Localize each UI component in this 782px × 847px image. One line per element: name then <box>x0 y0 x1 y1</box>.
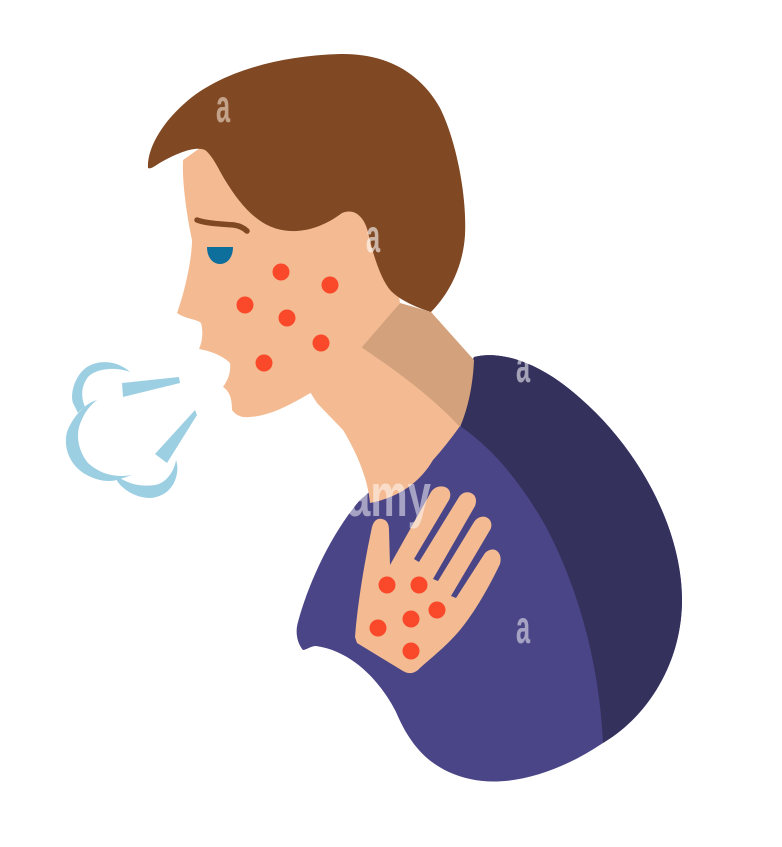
hair <box>148 54 465 312</box>
watermark letters: a <box>366 210 380 262</box>
eye <box>207 247 233 264</box>
cough air streak lower <box>155 410 197 463</box>
cough air streak upper <box>122 377 180 397</box>
sweater shadow <box>460 355 682 743</box>
eyebrow <box>197 220 247 231</box>
watermark letters: amy <box>347 462 431 529</box>
watermark letters: a <box>216 80 230 132</box>
palm rash spots <box>370 576 446 660</box>
sweater body <box>297 355 682 782</box>
face <box>177 148 400 417</box>
face rash spots <box>236 264 338 372</box>
hand <box>355 486 501 673</box>
neck shadow <box>361 303 474 427</box>
watermark letters: a <box>516 601 530 653</box>
cloud lower puff <box>117 460 177 498</box>
watermark letters: a <box>516 340 530 392</box>
cloud middle puff <box>66 400 132 481</box>
watermark letters <box>216 80 530 653</box>
cloud upper puff <box>72 362 130 413</box>
neck <box>310 303 474 503</box>
cough cloud <box>66 362 197 498</box>
